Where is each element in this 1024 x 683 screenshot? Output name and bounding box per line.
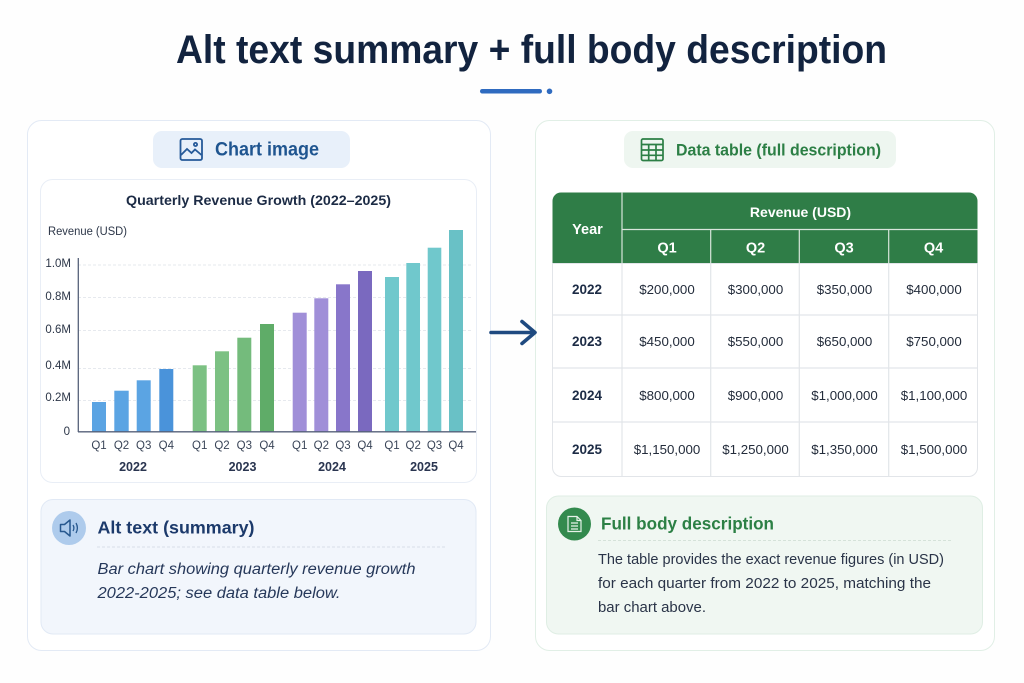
icon: picture: [180, 139, 202, 160]
chart image badge: [153, 131, 350, 168]
revenue table: [552, 192, 978, 476]
description heading: Full body description: [601, 514, 774, 534]
bar chart: 0.8M: [45, 291, 71, 303]
bar chart: Q3: [136, 440, 151, 452]
revenue table: $1,350,000: [811, 442, 878, 457]
alt text card: [41, 500, 476, 634]
bar chart: 2023: [229, 460, 256, 474]
panel: data table: [536, 120, 994, 650]
bar chart: 2024: [318, 460, 346, 474]
title: Alt text summary + full body description: [176, 28, 887, 72]
bar chart: 0.4M: [45, 360, 71, 372]
revenue table: 2024: [572, 388, 603, 403]
icon: table grid: [642, 139, 663, 160]
revenue table: Q3: [834, 240, 854, 256]
panel: chart image: [28, 120, 490, 650]
revenue table: 2022: [572, 282, 602, 297]
revenue table: $1,500,000: [901, 442, 967, 457]
arrow: [491, 322, 535, 344]
revenue table: $350,000: [817, 282, 872, 297]
bar chart: Q1: [192, 440, 207, 452]
revenue table: $1,250,000: [722, 442, 789, 457]
bar chart: Q1: [292, 440, 307, 452]
revenue table: $900,000: [728, 388, 783, 403]
revenue table: $750,000: [906, 334, 962, 349]
chart image badge: Chart image: [215, 140, 319, 160]
revenue table: $400,000: [906, 282, 962, 297]
revenue table: Year: [572, 222, 603, 238]
bar chart: [45, 230, 476, 474]
revenue table: $200,000: [639, 282, 695, 297]
y axis title: Revenue (USD): [48, 226, 127, 238]
revenue table: $550,000: [728, 334, 783, 349]
alt text body: Bar chart showing quarterly revenue growth: [98, 561, 416, 578]
bar chart: 0.2M: [45, 392, 71, 404]
bar chart: 2022: [119, 460, 147, 474]
bar chart: Q2: [314, 440, 329, 452]
full body description card: [546, 496, 982, 634]
bar chart: Q4: [159, 440, 175, 452]
revenue table: 2023: [572, 334, 603, 349]
chart card: [40, 180, 476, 482]
revenue table: $1,100,000: [901, 388, 967, 403]
bar chart: Q2: [214, 440, 230, 452]
revenue table: $650,000: [817, 334, 872, 349]
bar chart: 1.0M: [45, 258, 71, 270]
description body: bar chart above.: [598, 600, 706, 616]
revenue table: Revenue (USD): [750, 204, 851, 220]
bar chart: Q4: [357, 440, 373, 452]
bar chart: Q2: [406, 440, 421, 452]
revenue table: $450,000: [639, 334, 695, 349]
icon: document: [558, 508, 591, 540]
bar chart: Q2: [114, 440, 129, 452]
alt text body: 2022-2025; see data table below.: [96, 585, 340, 602]
title underline accent: [480, 88, 552, 94]
revenue table: $300,000: [728, 282, 783, 297]
revenue table: Q1: [657, 240, 677, 256]
data table badge: Data table (full description): [676, 140, 881, 160]
alt text heading: Alt text (summary): [98, 518, 254, 538]
revenue table: $1,150,000: [634, 442, 700, 457]
revenue table: Q4: [924, 240, 943, 256]
bar chart: Q1: [91, 440, 107, 452]
bar chart: 0.6M: [45, 324, 71, 336]
bar chart: Q3: [427, 440, 442, 452]
bar chart: 0: [64, 426, 70, 438]
description body: for each quarter from 2022 to 2025, matching the: [598, 576, 931, 592]
bar chart: Q1: [384, 440, 400, 452]
icon: speaker: [52, 511, 86, 545]
revenue table: $800,000: [639, 388, 695, 403]
revenue table: $1,000,000: [811, 388, 878, 403]
bar chart: Q3: [237, 440, 252, 452]
chart title: Quarterly Revenue Growth (2022–2025): [126, 192, 391, 208]
bar chart: 2025: [410, 460, 438, 474]
bar chart: Q4: [448, 440, 464, 452]
revenue table: 2025: [572, 442, 603, 457]
bar chart: Q4: [259, 440, 275, 452]
revenue table: Q2: [746, 240, 765, 256]
data table badge: [624, 131, 896, 168]
description body: The table provides the exact revenue figures (in USD): [598, 552, 944, 568]
bar chart: Q3: [335, 440, 351, 452]
